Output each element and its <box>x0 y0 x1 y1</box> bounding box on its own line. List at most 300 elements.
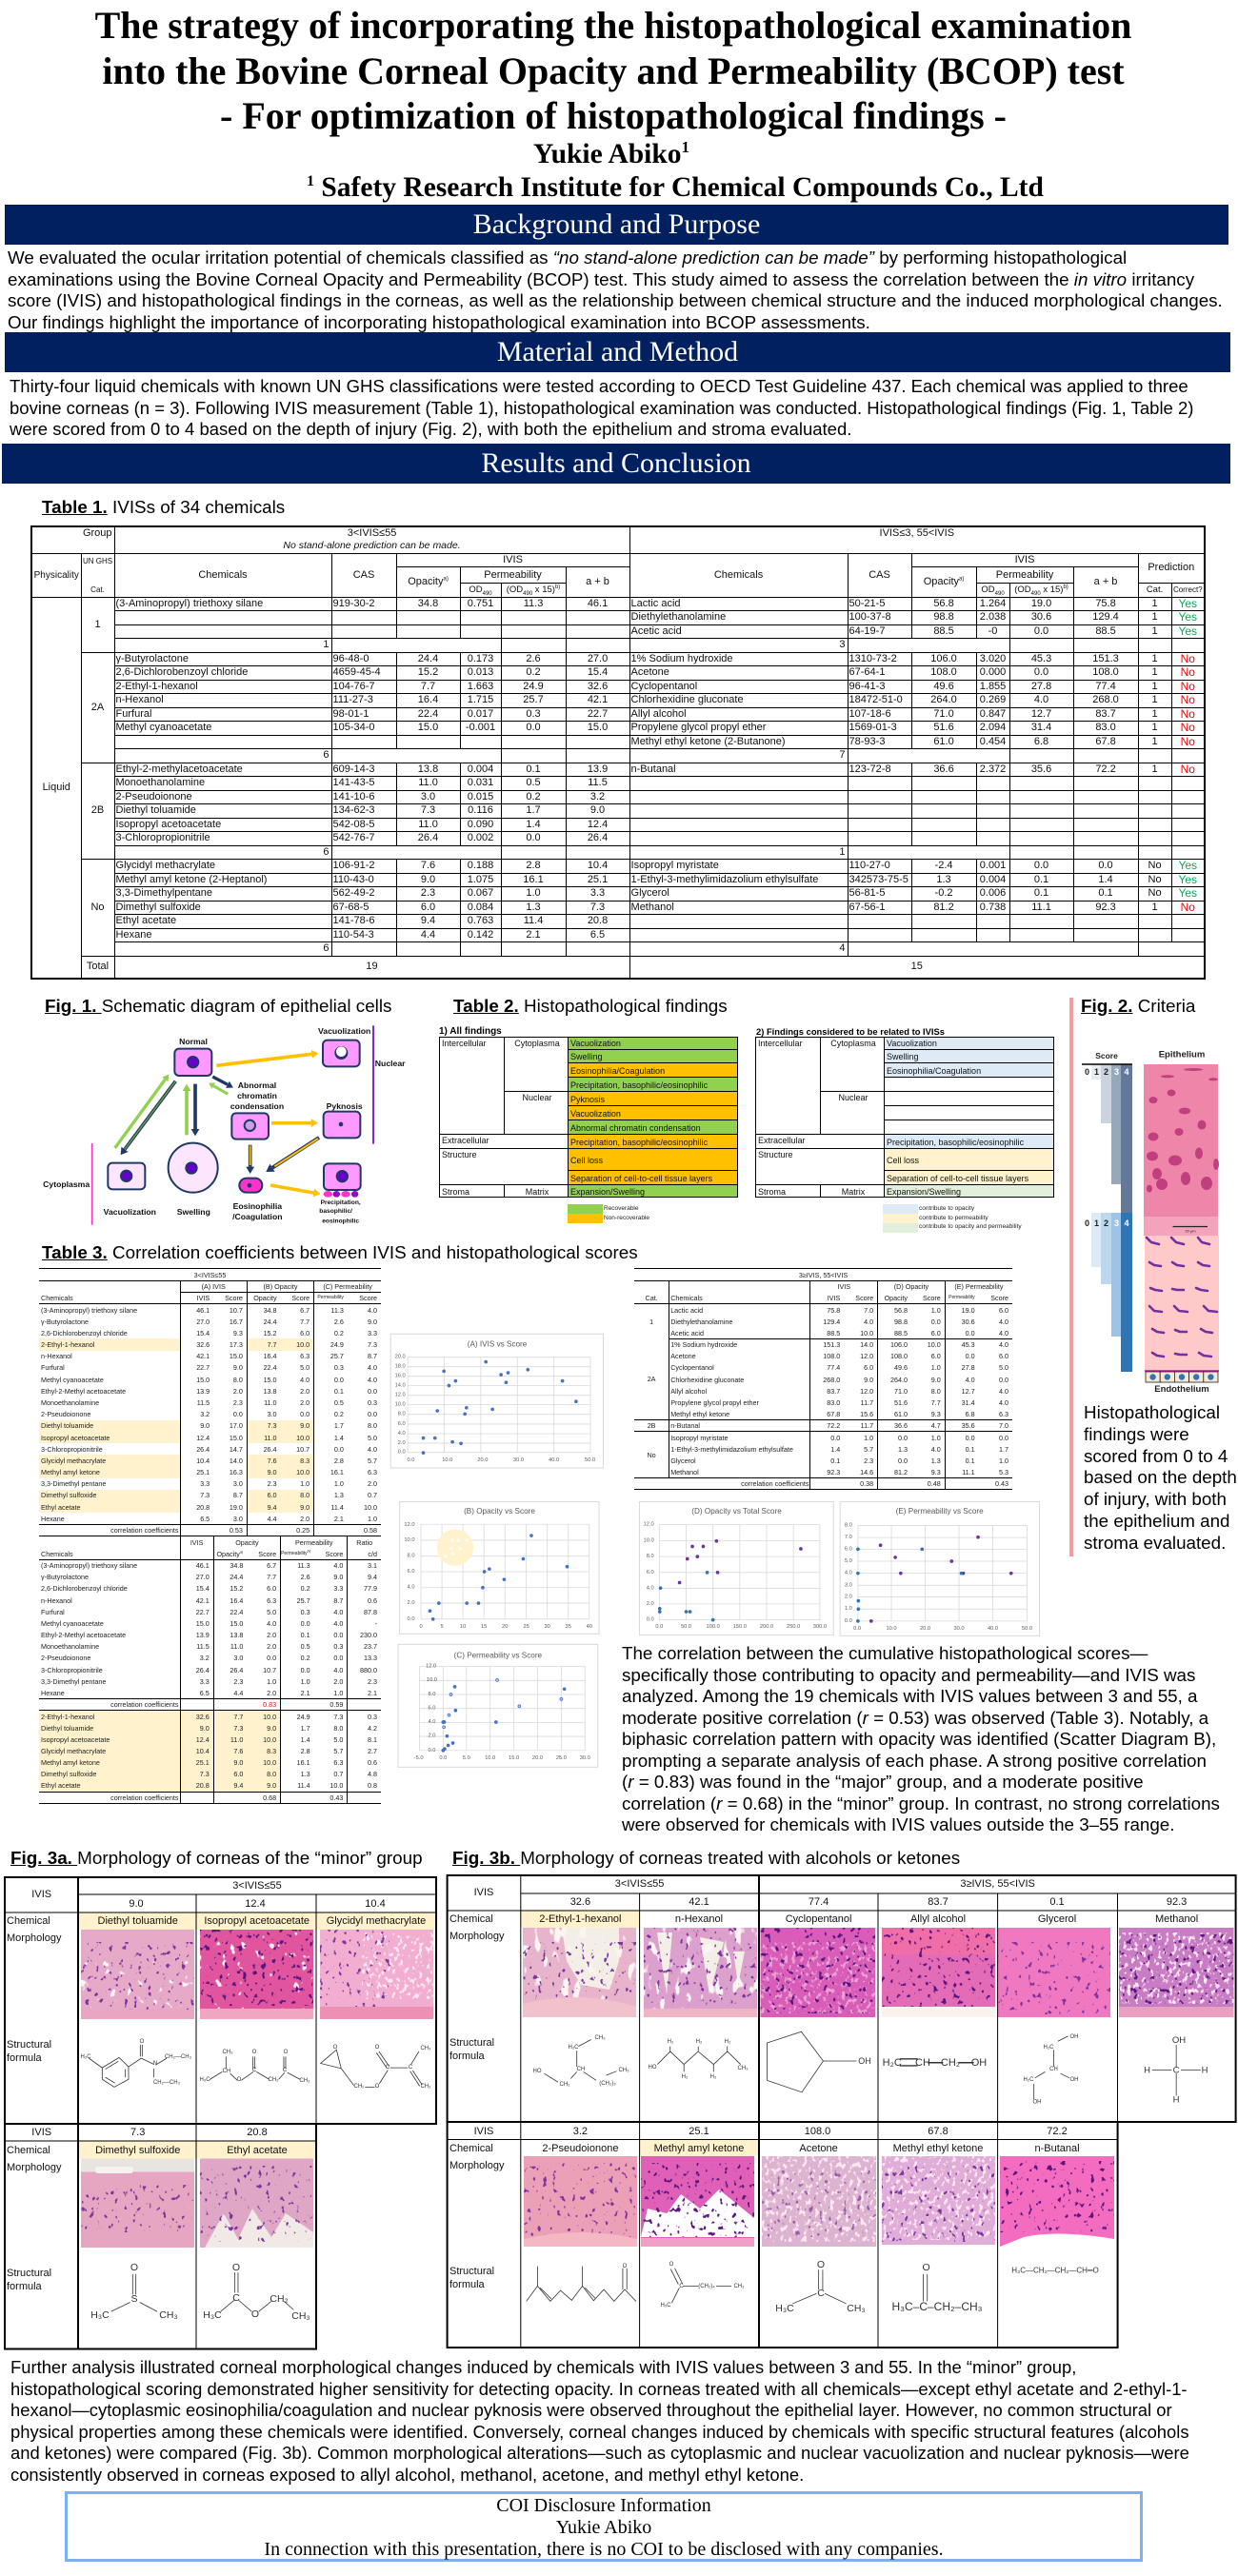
chart E: permeability vs score: 0.0 <box>853 1626 861 1632</box>
chart E: permeability vs score: 1.0 <box>845 1606 852 1612</box>
table 3 right: correlations outside the 3 to 55 range: 2.3 <box>864 1456 873 1465</box>
table 1: IVISs of 34 chemicals: Furfural <box>116 708 151 720</box>
table 3 right: correlations outside the 3 to 55 range: Score <box>990 1294 1008 1302</box>
table 3 right: correlations outside the 3 to 55 range: 75.8 <box>827 1306 840 1315</box>
table labels: 67.8 <box>928 2126 948 2137</box>
table 3 left upper: correlations for 3 to 55 group: 15.0 <box>196 1376 210 1384</box>
table 3 right: correlations outside the 3 to 55 range: 151.3 <box>823 1340 840 1349</box>
table 3 left upper: correlations for 3 to 55 group: 22.4 <box>264 1363 277 1372</box>
table 3 left lower: major and minor group correlations: 26.4 <box>230 1666 243 1674</box>
structural formula: isopropyl acetoacetate: C <box>283 2068 288 2073</box>
table 3 left lower: major and minor group correlations: 3.3 <box>200 1677 210 1686</box>
chart A: IVIS vs score: 0.0 <box>398 1450 406 1456</box>
table 3 left lower: major and minor group correlations: 4.0 <box>333 1619 343 1628</box>
table 3 left lower: major and minor group correlations: 7.3 <box>233 1724 243 1733</box>
table 1: IVISs of 34 chemicals: No <box>1148 887 1162 899</box>
table 3 left upper: correlations for 3 to 55 group: (A) IVIS <box>202 1282 226 1291</box>
table 3 right: correlations outside the 3 to 55 range: 6.0 <box>864 1363 873 1372</box>
table 1: IVISs of 34 chemicals: 0.004 <box>980 874 1006 885</box>
table 3 left upper: correlations for 3 to 55 group: 11.3 <box>330 1306 344 1315</box>
table 1: IVISs of 34 chemicals: 2-Pseudoionone <box>116 791 192 803</box>
table 2 legend: recoverable <box>568 1204 649 1223</box>
table 3 left upper: correlations for 3 to 55 group: 3<IVIS≤55 <box>194 1270 226 1279</box>
table 3 left lower: major and minor group correlations: 24.4 <box>230 1573 243 1581</box>
chart B: opacity vs score: 20 <box>502 1624 508 1630</box>
table 1: IVISs of 34 chemicals: 141-10-6 <box>333 791 375 803</box>
table 1: IVISs of 34 chemicals: 15.4 <box>588 666 608 678</box>
table 3 left upper: correlations for 3 to 55 group: 6.5 <box>200 1515 210 1523</box>
heading: table 2: Table 2. Histopathological findings <box>453 996 728 1016</box>
structural formula: glycerol: OH <box>1032 2100 1042 2106</box>
table 1: IVISs of 34 chemicals: 71.0 <box>933 708 954 720</box>
table 3 left lower: major and minor group correlations: 4.0 <box>333 1666 343 1674</box>
table 3 right: correlations outside the 3 to 55 range: 5.3 <box>999 1468 1008 1476</box>
table 3 left upper: correlations for 3 to 55 group: 2.1 <box>334 1515 344 1523</box>
table labels: Methyl ethyl ketone <box>893 2143 983 2154</box>
table 1: IVISs of 34 chemicals: 141-78-6 <box>333 915 375 926</box>
chart E: permeability vs score: 20.0 <box>920 1626 930 1632</box>
table 1: IVISs of 34 chemicals: (OD490 x 15)b) <box>1014 585 1068 597</box>
table 1: IVISs of 34 chemicals: 1.4 <box>1098 874 1113 885</box>
table 1: IVISs of 34 chemicals: 0.2 <box>526 666 541 678</box>
chart A: IVIS vs score: 16.0 <box>395 1374 406 1379</box>
table 1: IVISs of 34 chemicals: 108.0 <box>1092 666 1119 678</box>
structural formula: methanol <box>1144 2035 1208 2106</box>
table 3 left lower: major and minor group correlations: 77.9 <box>364 1584 377 1593</box>
table 1: IVISs of 34 chemicals: 0.0 <box>1098 860 1113 871</box>
table 1: IVISs of 34 chemicals: a + b <box>586 576 609 587</box>
table 1: IVISs of 34 chemicals: 13.8 <box>418 763 438 775</box>
table 1: IVISs of 34 chemicals: 9.0 <box>590 804 605 816</box>
heading: figure 3a: Fig. 3a. Morphology of corneas of the “minor” group <box>10 1848 423 1868</box>
text: scoring description: Histopathological <box>1084 1402 1220 1422</box>
structural formula: 2-ethyl-1-hexanol <box>533 2035 629 2088</box>
table 1: IVISs of 34 chemicals: 4.0 <box>1034 694 1048 705</box>
table 3 right: correlations outside the 3 to 55 range: 8.0 <box>931 1387 941 1396</box>
table 1: IVISs of 34 chemicals: 92.3 <box>1095 902 1116 913</box>
table 1: IVISs of 34 chemicals: 0.142 <box>468 929 493 941</box>
table 3 left upper: correlations for 3 to 55 group: Diethyl toluamide <box>41 1421 93 1430</box>
table 3 left lower: major and minor group correlations: 2-Ethyl-1-hexanol <box>41 1713 94 1721</box>
chart A: IVIS vs score <box>390 1334 603 1468</box>
table 3 left lower: major and minor group correlations: 10.0 <box>263 1713 276 1721</box>
table 3 left upper: correlations for 3 to 55 group: 3-Chloropropionitrile <box>41 1445 103 1454</box>
cell labels: Pyknosis <box>327 1101 363 1111</box>
table 1: IVISs of 34 chemicals: 542-76-7 <box>333 832 375 843</box>
table 3 left upper: correlations for 3 to 55 group: 9.0 <box>368 1318 377 1326</box>
table 3 left upper: correlations for 3 to 55 group: 2.0 <box>300 1398 310 1407</box>
table 3 left upper: correlations for 3 to 55 group: 2-Pseudoionone <box>41 1410 90 1418</box>
histology: 2-pseudoionone <box>524 2156 637 2247</box>
text: scoring description: of injury, with both <box>1084 1489 1227 1509</box>
table labels: formula <box>7 2052 43 2064</box>
table 1: IVISs of 34 chemicals: 96-41-3 <box>849 681 885 692</box>
table 1: IVISs of 34 chemicals: OD490 <box>469 585 492 597</box>
table 3 right: correlations outside the 3 to 55 range: 1.0 <box>864 1434 873 1442</box>
table 2 legend: recoverable: Non-recoverable <box>604 1215 649 1220</box>
table 3 left upper: correlations for 3 to 55 group: 0.2 <box>334 1410 344 1418</box>
table labels: IVIS <box>31 1889 51 1900</box>
table 3 left lower: major and minor group correlations: 0.1 <box>301 1631 310 1639</box>
table 3 left lower: major and minor group correlations: 11.0 <box>230 1642 243 1651</box>
chart C: permeability vs score: 20.0 <box>532 1755 543 1761</box>
table 1: IVISs of 34 chemicals: 7.7 <box>421 681 435 692</box>
table 3 left upper: correlations for 3 to 55 group: 15.0 <box>264 1376 277 1384</box>
structural formula: 2-ethyl-1-hexanol: CH₃ <box>618 2068 629 2073</box>
table 3 right: correlations outside the 3 to 55 range: 268.0 <box>823 1376 840 1384</box>
table 1: IVISs of 34 chemicals: 111-27-3 <box>333 694 373 705</box>
chart A: IVIS vs score: 8.0 <box>398 1412 406 1417</box>
table 1: IVISs of 34 chemicals: Prediction <box>1148 562 1194 573</box>
table labels: Ethyl acetate <box>227 2145 288 2156</box>
table 3 right: correlations outside the 3 to 55 range: 12.0 <box>860 1387 873 1396</box>
table 3 left lower: major and minor group correlations: - <box>375 1619 377 1628</box>
table 1: IVISs of 34 chemicals: No <box>1181 901 1195 914</box>
table 3 left lower: major and minor group correlations: 0.43 <box>329 1793 343 1802</box>
table 3 right: correlations outside the 3 to 55 range: 6.0 <box>999 1352 1008 1360</box>
table 3 right: correlations outside the 3 to 55 range: (D) Opacity <box>894 1282 928 1291</box>
table 3 left lower: major and minor group correlations: 8.1 <box>368 1735 377 1744</box>
table 1: IVISs of 34 chemicals: 0.0 <box>1034 666 1048 678</box>
epithelium histology image: 20 µm <box>1185 1228 1196 1234</box>
table labels: Methyl amyl ketone <box>654 2143 744 2154</box>
table 3 left lower: major and minor group correlations <box>39 1536 381 1804</box>
chart D: opacity vs total score: 300.0 <box>813 1624 827 1630</box>
table 3 left upper: correlations for 3 to 55 group: 12.4 <box>196 1434 210 1442</box>
table 1: IVISs of 34 chemicals: 67.8 <box>1095 736 1116 747</box>
table 3 left lower: major and minor group correlations: 10.4 <box>196 1747 210 1755</box>
table 3 right: correlations outside the 3 to 55 range: Opacity <box>885 1294 908 1302</box>
table 3 left lower: major and minor group correlations: 6.5 <box>200 1689 210 1697</box>
table 3 right: correlations outside the 3 to 55 range: 5.0 <box>999 1363 1008 1372</box>
chart C: permeability vs score: 6.0 <box>429 1706 435 1712</box>
table 3 right: correlations outside the 3 to 55 range: 72.2 <box>827 1421 840 1430</box>
table 3 left lower: major and minor group correlations: 20.8 <box>196 1781 210 1790</box>
table 3 left upper: correlations for 3 to 55 group: Ethyl-2-Methyl acetoacetate <box>41 1387 126 1396</box>
table 3 left upper: correlations for 3 to 55 group: Permeability <box>317 1295 344 1300</box>
table 3 right: correlations outside the 3 to 55 range: 1.4 <box>830 1445 840 1454</box>
COI disclosure box: Yukie Abiko <box>556 2517 651 2538</box>
table 1: IVISs of 34 chemicals: 2.372 <box>980 763 1006 775</box>
table 1: IVISs of 34 chemicals: 542-08-5 <box>333 819 375 830</box>
chart B: opacity vs score: 6.0 <box>408 1569 415 1575</box>
table 3 left lower: major and minor group correlations: correlation coefficients <box>110 1700 179 1709</box>
table 1: IVISs of 34 chemicals: 36.6 <box>933 763 954 775</box>
chart E: permeability vs score: 40.0 <box>988 1626 998 1632</box>
text: scoring description: scored from 0 to 4 <box>1084 1446 1228 1466</box>
table 1: IVISs of 34 chemicals: 32.6 <box>588 681 608 692</box>
table 1: IVISs of 34 chemicals: n-Hexanol <box>116 694 164 705</box>
table 1: IVISs of 34 chemicals: 0.0 <box>526 832 541 843</box>
table 1: IVISs of 34 chemicals: 0.173 <box>468 653 493 664</box>
table 3 left upper: correlations for 3 to 55 group: (B) Opacity <box>264 1282 297 1291</box>
chart B: opacity vs score: 10.0 <box>404 1537 415 1543</box>
table 2 part 1: all findings: Precipitation, basophilic/eosinophilic <box>570 1080 708 1089</box>
table 3 left lower: major and minor group correlations: 15.0 <box>196 1619 210 1628</box>
chart A: IVIS vs score: 10.0 <box>395 1402 406 1408</box>
table 3 left lower: major and minor group correlations: 11.3 <box>297 1561 310 1570</box>
table 2 part 1: all findings: Stroma <box>442 1186 469 1196</box>
title: - For optimization of histopathological findings - <box>220 94 1007 137</box>
table 2 part 1: all findings: Cell loss <box>570 1156 603 1165</box>
table 1: IVISs of 34 chemicals: 2.038 <box>980 611 1006 623</box>
table 1: IVISs of 34 chemicals: 61.0 <box>933 736 954 747</box>
table 2 part 2: findings related to IVISs: Eosinophilia/Coagulation <box>887 1066 981 1076</box>
table 1: IVISs of 34 chemicals: γ-Butyrolactone <box>116 653 189 664</box>
table 3 left lower: major and minor group correlations: 7.3 <box>333 1713 343 1721</box>
structural formula: n-hexanol: H₂ <box>725 2039 731 2045</box>
table 1: IVISs of 34 chemicals: 0.1 <box>526 763 541 775</box>
table 3 left lower: major and minor group correlations: 1.0 <box>301 1677 310 1686</box>
structural formula: n-hexanol <box>648 2039 749 2080</box>
text: background: Our findings highlight the importance of incorporating histopathological examination into BCOP assessments. <box>8 312 870 331</box>
text: background: We evaluated the ocular irritation potential of chemicals classified as “no stand-alone prediction can be made” by performing histopathological <box>8 248 1127 268</box>
table 3 right: correlations outside the 3 to 55 range <box>634 1268 1012 1490</box>
table 1: IVISs of 34 chemicals: 105-34-0 <box>333 722 375 733</box>
text: scoring description: stroma evaluated. <box>1084 1533 1226 1553</box>
table 1: IVISs of 34 chemicals: 268.0 <box>1092 694 1119 705</box>
table 1: IVISs of 34 chemicals: Liquid <box>43 782 70 793</box>
table 3 left upper: correlations for 3 to 55 group: 3.0 <box>233 1515 243 1523</box>
table 3 right: correlations outside the 3 to 55 range: 108.0 <box>823 1352 840 1360</box>
table 3 left upper: correlations for 3 to 55 group: 10.7 <box>230 1306 243 1315</box>
histology: methyl amyl ketone <box>641 2156 754 2247</box>
table 3 left lower: major and minor group correlations: 9.4 <box>368 1573 377 1581</box>
table 3 left upper: correlations for 3 to 55 group: (3-Aminopropyl) triethoxy silane <box>41 1306 137 1315</box>
table 3 left upper: correlations for 3 to 55 group: 10.4 <box>196 1456 210 1465</box>
table 1: IVISs of 34 chemicals: 1 <box>1151 694 1158 705</box>
table 3 right: correlations outside the 3 to 55 range: 108.0 <box>890 1352 908 1360</box>
table 1: IVISs of 34 chemicals: 3,3-Dimethylpentane <box>116 887 212 899</box>
table 1: IVISs of 34 chemicals: Opacitya) <box>408 576 449 587</box>
table 3 right: correlations outside the 3 to 55 range: Lactic acid <box>670 1306 703 1315</box>
table 1: IVISs of 34 chemicals: Opacitya) <box>924 576 964 587</box>
table 1: IVISs of 34 chemicals: 141-43-5 <box>333 777 375 788</box>
table 3 left lower: major and minor group correlations: 0.0 <box>301 1666 310 1674</box>
table 3 left lower: major and minor group correlations: 2-Pseudoionone <box>41 1654 90 1662</box>
table 1: IVISs of 34 chemicals: Yes <box>1178 611 1197 624</box>
cell labels: Nuclear <box>375 1059 406 1068</box>
table 3 right: correlations outside the 3 to 55 range: Permeability <box>948 1295 975 1300</box>
table 3 left lower: major and minor group correlations: 2.1 <box>301 1689 310 1697</box>
table 1: IVISs of 34 chemicals: 3-Chloropropionitrile <box>116 832 210 843</box>
table 3 left upper: correlations for 3 to 55 group: 11.0 <box>264 1398 277 1407</box>
table 3 left lower: major and minor group correlations: 10.0 <box>263 1758 276 1767</box>
table 3 left upper: correlations for 3 to 55 group: 11.0 <box>264 1434 277 1442</box>
chart A: IVIS vs score: 18.0 <box>395 1364 406 1370</box>
table 1: IVISs of 34 chemicals: n-Butanal <box>631 763 676 775</box>
table 3 right: correlations outside the 3 to 55 range: 56.8 <box>894 1306 908 1315</box>
table 3 left upper: correlations for 3 to 55 group: 6.0 <box>300 1329 310 1338</box>
table 2 part 1: all findings: Precipitation, basophilic/eosinophilic <box>570 1137 708 1146</box>
table 3 right: correlations outside the 3 to 55 range: Acetic acid <box>670 1329 704 1338</box>
table 1: IVISs of 34 chemicals: 15.2 <box>418 666 438 678</box>
table 1: IVISs of 34 chemicals: 6 <box>323 846 329 858</box>
table 3 left lower: major and minor group correlations: Glycidyl methacrylate <box>41 1747 106 1755</box>
table 3 right: correlations outside the 3 to 55 range: 4.0 <box>999 1329 1008 1338</box>
table 3 right: correlations outside the 3 to 55 range: Diethylethanolamine <box>670 1318 732 1326</box>
table 3 left lower: major and minor group correlations: 25.1 <box>196 1758 210 1767</box>
table 3 right: correlations outside the 3 to 55 range: 11.7 <box>861 1398 873 1407</box>
cell: cytoplasmic vacuolization <box>108 1163 145 1189</box>
table 1: IVISs of 34 chemicals: 88.5 <box>1095 625 1116 637</box>
chart C: permeability vs score: 10.0 <box>485 1755 495 1761</box>
table 1: IVISs of 34 chemicals: Cyclopentanol <box>631 681 697 692</box>
table 1: IVISs of 34 chemicals: 96-48-0 <box>333 653 369 664</box>
table 3 right: correlations outside the 3 to 55 range: 1% Sodium hydroxide <box>670 1340 737 1349</box>
cell labels: Swelling <box>177 1207 210 1217</box>
table labels: Morphology <box>7 2162 62 2173</box>
heading: table 1: Table 1. IVISs of 34 chemicals <box>42 497 285 517</box>
table 3 left lower: major and minor group correlations: 2.3 <box>368 1677 377 1686</box>
table 1: IVISs of 34 chemicals: 83.0 <box>1095 722 1116 733</box>
table labels: formula <box>449 2279 486 2290</box>
table 1: IVISs of 34 chemicals: Acetic acid <box>631 625 682 637</box>
table 3 left upper: correlations for 3 to 55 group: 11.4 <box>330 1503 344 1512</box>
table 3 left upper: correlations for 3 to 55 group: 25.1 <box>196 1468 210 1476</box>
structural formula: n-hexanol: H₂ <box>696 2039 703 2045</box>
table 3 left upper: correlations for 3 to 55 group: Methyl amyl ketone <box>41 1468 100 1476</box>
table 1: IVISs of 34 chemicals: Methyl ethyl ketone (2-Butanone) <box>631 736 786 747</box>
table labels <box>449 1878 1198 2290</box>
table 3 right: correlations outside the 3 to 55 range: 0.0 <box>931 1318 941 1326</box>
table 1: IVISs of 34 chemicals: No <box>1148 860 1162 871</box>
structural formula: glycidyl methacrylate: O <box>375 2084 380 2090</box>
table 1: IVISs of 34 chemicals: Isopropyl acetoacetate <box>116 819 221 830</box>
table 1: IVISs of 34 chemicals: No stand-alone prediction can be made. <box>283 540 461 551</box>
table 3 left upper: correlations for 3 to 55 group: 2.0 <box>233 1387 243 1396</box>
heading: figure 3b: Fig. 3b. Morphology of corneas treated with alcohols or ketones <box>452 1848 960 1868</box>
table 3 left upper: correlations for 3 to 55 group: 0.7 <box>368 1491 377 1499</box>
stroma score bars: 0 <box>1085 1219 1089 1228</box>
table 1: IVISs of 34 chemicals: 0.1 <box>1098 887 1113 899</box>
table 3 left upper: correlations for 3 to 55 group: Ethyl acetate <box>41 1503 81 1512</box>
table 3 left lower: major and minor group correlations: 1.0 <box>267 1677 276 1686</box>
table labels: Chemical <box>449 1913 493 1925</box>
structural formula: glycidyl methacrylate: CH₃ <box>420 2046 431 2051</box>
table 1: IVISs of 34 chemicals: 123-72-8 <box>849 763 891 775</box>
table 3 right: correlations outside the 3 to 55 range: 51.6 <box>894 1398 908 1407</box>
chart E: permeability vs score <box>840 1502 1040 1635</box>
table 3 left upper: correlations for 3 to 55 group: 25.7 <box>330 1352 344 1360</box>
table 1: IVISs of 34 chemicals: 1% Sodium hydroxide <box>631 653 733 664</box>
table 3 left upper: correlations for 3 to 55 group: 0.0 <box>334 1445 344 1454</box>
table 3 left lower: major and minor group correlations: 2.8 <box>301 1747 310 1755</box>
table 1: IVISs of 34 chemicals: IVIS <box>1015 554 1034 565</box>
structural formula: glycidyl methacrylate: C <box>409 2065 413 2071</box>
structural formula: 2-pseudoionone: O <box>623 2264 628 2269</box>
table 3 left upper: correlations for 3 to 55 group: 2.0 <box>300 1387 310 1396</box>
table 1: IVISs of 34 chemicals: 56.8 <box>933 598 954 609</box>
structural formula: methanol: H <box>1173 2094 1180 2106</box>
table 3 left lower: major and minor group correlations: 13.9 <box>196 1631 210 1639</box>
table 1: IVISs of 34 chemicals: Correct? <box>1173 585 1203 594</box>
table 1: IVISs of 34 chemicals: 27.8 <box>1031 681 1051 692</box>
table 1: IVISs of 34 chemicals: Glycidyl methacrylate <box>116 860 215 871</box>
table 1: IVISs of 34 chemicals: 1.075 <box>468 874 493 885</box>
table 3 right: correlations outside the 3 to 55 range: 4.0 <box>966 1376 975 1384</box>
text: correlation results: moderate positive correlation (r = 0.53) was observed (Table 3). Notably, a <box>622 1708 1208 1727</box>
structural formula: glycidyl methacrylate: CH₂ <box>354 2084 365 2090</box>
table 1: IVISs of 34 chemicals: No <box>1181 680 1195 693</box>
table 1: IVISs of 34 chemicals: 0.0 <box>526 722 541 733</box>
table 1: IVISs of 34 chemicals: Yes <box>1178 887 1197 900</box>
table 1: IVISs of 34 chemicals: 1.663 <box>468 681 493 692</box>
table 3 left lower: major and minor group correlations: 3.3 <box>333 1584 343 1593</box>
table 1: IVISs of 34 chemicals: Allyl alcohol <box>631 708 687 720</box>
table 2 part 2 heading: 2) Findings considered to be related to IVISs <box>756 1026 945 1037</box>
chart D: opacity vs total score: 100.0 <box>707 1624 720 1630</box>
table 3 left lower: major and minor group correlations: Methyl cyanoacetate <box>41 1619 104 1628</box>
table 2 part 2: findings related to IVISs: Nuclear <box>838 1093 869 1102</box>
table 3 left upper: correlations for 3 to 55 group: 0.25 <box>296 1526 310 1535</box>
table 3 left upper: correlations for 3 to 55 group: 34.8 <box>264 1306 277 1315</box>
chart C: permeability vs score: 12.0 <box>426 1664 436 1670</box>
table 1: IVISs of 34 chemicals: 81.2 <box>933 902 954 913</box>
table labels: Morphology <box>449 2160 505 2171</box>
table 1: IVISs of 34 chemicals: 1 <box>1151 598 1158 609</box>
table 1: IVISs of 34 chemicals: 15.0 <box>588 722 608 733</box>
table 3 left upper: correlations for 3 to 55 group: 16.1 <box>330 1468 344 1476</box>
epithelium score bars: 0 <box>1085 1067 1089 1077</box>
table 3 left upper: correlations for 3 to 55 group: 1.0 <box>300 1479 310 1488</box>
text: method <box>10 376 1193 439</box>
table labels: Structural <box>449 2266 494 2277</box>
section heading: results and conclusion <box>2 444 1230 484</box>
table 1: IVISs of 34 chemicals: 22.7 <box>588 708 608 720</box>
figure 3b: morphology table for alcohols and ketones <box>446 1874 1237 2348</box>
table 1: IVISs of 34 chemicals: 1 <box>1151 666 1158 678</box>
table 3 left upper: correlations for 3 to 55 group: 9.0 <box>300 1503 310 1512</box>
table 3 left upper: correlations for 3 to 55 group: Monoethanolamine <box>41 1398 99 1407</box>
table 3 left lower: major and minor group correlations: Permeability <box>295 1538 333 1547</box>
table 3 left upper: correlations for 3 to 55 group: 42.1 <box>196 1352 210 1360</box>
table 3 left lower: major and minor group correlations: 11.5 <box>196 1642 210 1651</box>
text: further analysis <box>10 2357 1189 2485</box>
table 2 legend: contributions: contribute to permeability <box>919 1215 988 1220</box>
table 3 right: correlations outside the 3 to 55 range: 1.3 <box>898 1445 908 1454</box>
chart E: permeability vs score: 3.0 <box>845 1582 852 1588</box>
structural formula: dimethyl sulfoxide: H₃C <box>90 2309 110 2321</box>
table 1: IVISs of 34 chemicals: 0.067 <box>468 887 493 899</box>
stroma schematic with keratocytes <box>1145 1236 1219 1371</box>
table 3 left lower: major and minor group correlations: 23.7 <box>364 1642 377 1651</box>
table 3 left upper: correlations for 3 to 55 group: γ-Butyrolactone <box>41 1318 89 1326</box>
table 3 left lower: major and minor group correlations: 10.7 <box>263 1666 276 1674</box>
table 1: IVISs of 34 chemicals: 6 <box>323 942 329 954</box>
stroma score bars: 1 <box>1094 1219 1099 1228</box>
table 3 left upper: correlations for 3 to 55 group: 20.8 <box>196 1503 210 1512</box>
chart C: permeability vs score: 10.0 <box>427 1677 437 1683</box>
structural formula: methyl ethyl ketone: H₃C–C–CH₂–CH₃ <box>891 2300 983 2313</box>
table 3 left upper: correlations for 3 to 55 group: 10.7 <box>296 1445 310 1454</box>
cell: eosinophilia and coagulation <box>239 1179 262 1193</box>
table 1: IVISs of 34 chemicals: Hexane <box>116 929 151 941</box>
table labels: 7.3 <box>130 2127 145 2138</box>
table 1: IVISs of 34 chemicals: 1 <box>1151 708 1158 720</box>
table 3 left lower: major and minor group correlations: 7.6 <box>233 1747 243 1755</box>
structural formula: n-butanal: H₃C—CH₂—CH₂—CH═O <box>1011 2266 1099 2275</box>
table 3 left lower: major and minor group correlations: 46.1 <box>196 1561 210 1570</box>
table 1: IVISs of 34 chemicals: 0.5 <box>526 777 541 788</box>
table 3 left upper: correlations for 3 to 55 group: 6.3 <box>368 1468 377 1476</box>
table 3 left upper: correlations for 3 to 55 group: 14.0 <box>230 1456 243 1465</box>
cell labels: Precipitation, <box>321 1199 361 1206</box>
chart C: permeability vs score: 0.0 <box>429 1748 435 1754</box>
table 3 right: correlations outside the 3 to 55 range: 1.7 <box>999 1445 1008 1454</box>
stroma score bars <box>1085 1213 1132 1372</box>
structural formula: cyclopentanol <box>768 2031 871 2092</box>
